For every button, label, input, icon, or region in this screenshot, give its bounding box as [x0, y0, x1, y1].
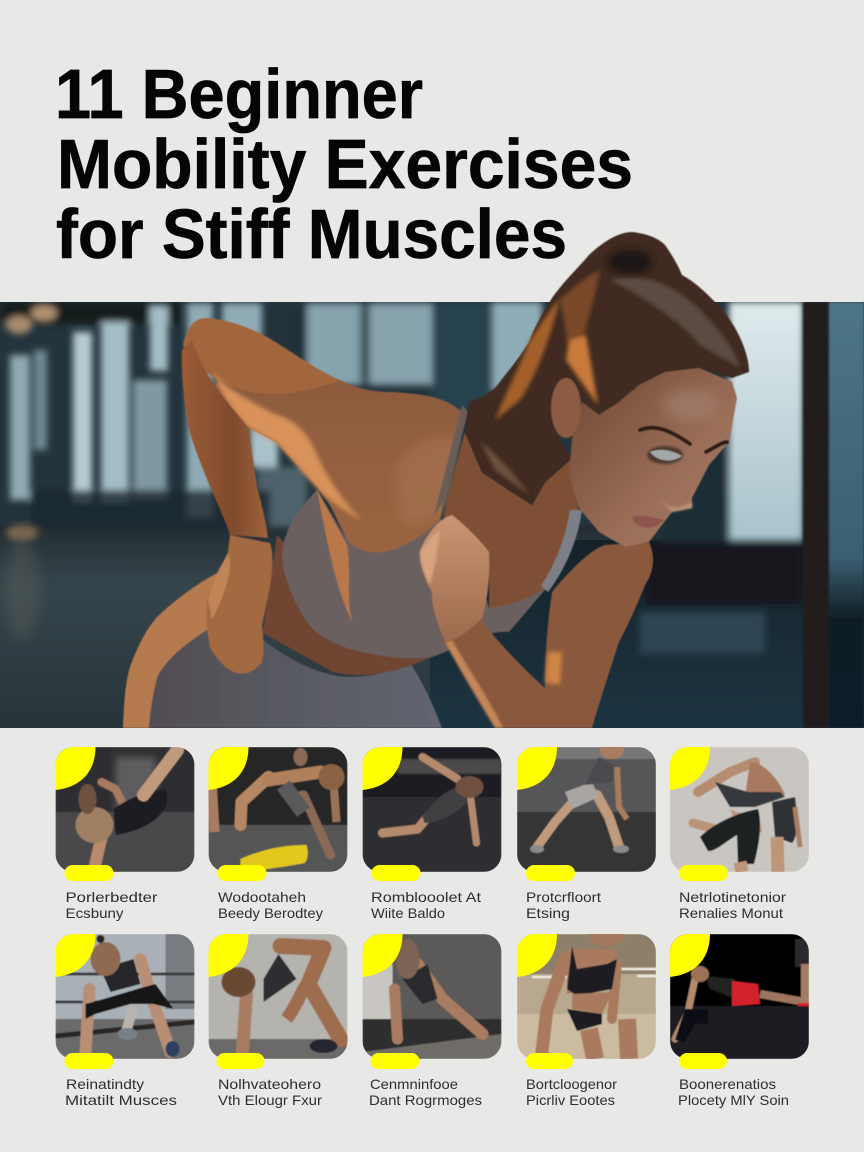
crop top [282, 490, 546, 659]
ear [551, 378, 581, 438]
hand on hip [206, 535, 272, 674]
yellow corner tab [208, 747, 248, 790]
caption: Porlerbedter [66, 889, 158, 905]
exercise card 10 [670, 934, 809, 1108]
yellow pill [218, 865, 266, 881]
yellow corner tab [517, 747, 557, 790]
upper arm top [183, 318, 340, 394]
lit streak on arm [212, 372, 362, 520]
title: for Stiff Muscles [56, 195, 567, 273]
caption: Bortcloogenor [526, 1076, 617, 1092]
yellow pill [526, 1053, 573, 1069]
exercise card 4 [517, 741, 656, 921]
midriff [263, 535, 436, 675]
chest skin [442, 432, 579, 608]
yellow corner tab [56, 934, 96, 977]
yellow pill [526, 865, 575, 881]
face [569, 368, 737, 547]
yellow corner tab [670, 934, 710, 977]
exercise card 4: Etsing [526, 905, 570, 921]
leggings [148, 630, 442, 728]
exercise card 3 [362, 747, 502, 921]
yellow corner tab [362, 747, 402, 790]
exercise card 1: Ecsbuny [66, 905, 124, 921]
exercise card 7: Vth Elougr Fxur [218, 1092, 322, 1108]
ponytail and hair [465, 232, 749, 505]
exercise card 3: Wiite Baldo [371, 905, 445, 921]
caption: Wodootaheh [218, 889, 306, 905]
caption: Reinatindty [66, 1076, 144, 1092]
exercise card 7 [208, 934, 348, 1108]
exercise card 10: Plocety MlY Soin [678, 1092, 789, 1108]
front arm [445, 542, 653, 728]
exercise card 2: Beedy Berodtey [218, 905, 323, 921]
exercise card 8: Dant Rogrmoges [369, 1092, 482, 1108]
eye, brow, nose, lips [632, 428, 727, 528]
caption: Netrlotinetonior [679, 889, 786, 905]
caption: Protcrfloort [526, 889, 601, 905]
caption: Boonerenatios [679, 1076, 776, 1092]
caption: Cenmninfooe [370, 1076, 458, 1092]
yellow pill [372, 865, 420, 881]
title: 11 Beginner [55, 55, 423, 133]
yellow pill [679, 1053, 727, 1069]
yellow pill [216, 1053, 264, 1069]
back and shoulder [214, 379, 461, 553]
caption: Nolhvateohero [218, 1076, 321, 1092]
exercise card 9: Picrliv Eootes [526, 1092, 615, 1108]
exercise card 2 [208, 747, 348, 921]
hero photo: woman stretching in a gym [0, 232, 864, 728]
yellow pill [370, 1053, 420, 1069]
yellow pill [64, 1053, 114, 1069]
yellow corner tab [517, 934, 557, 977]
lit patch on arm [545, 652, 562, 685]
exercise card 5 [670, 747, 809, 921]
left strap [434, 405, 468, 515]
fist [420, 515, 489, 642]
exercise card 9 [517, 926, 656, 1108]
lit stripes on crop top [317, 490, 353, 623]
yellow corner tab [670, 747, 710, 790]
yellow pill [64, 865, 114, 881]
title [55, 55, 633, 273]
yellow corner tab [208, 934, 248, 977]
right strap [541, 510, 582, 592]
lit hip band [123, 573, 217, 728]
yellow pill [679, 865, 728, 881]
exercise card 6 [56, 934, 194, 1108]
yellow corner tab [56, 747, 96, 790]
forearm on hip [182, 340, 268, 538]
exercise card 8 [362, 934, 502, 1108]
exercise card 6: Mitatilt Musces [65, 1092, 177, 1108]
caption: Romblooolet At [371, 889, 481, 905]
exercise card 5: Renalies Monut [679, 905, 783, 921]
woman figure [123, 232, 749, 728]
yellow corner tab [362, 934, 402, 977]
blurred gym background [0, 302, 864, 728]
exercise card 1 [56, 747, 194, 921]
hair highlights [560, 270, 600, 360]
title: Mobility Exercises [57, 125, 633, 203]
